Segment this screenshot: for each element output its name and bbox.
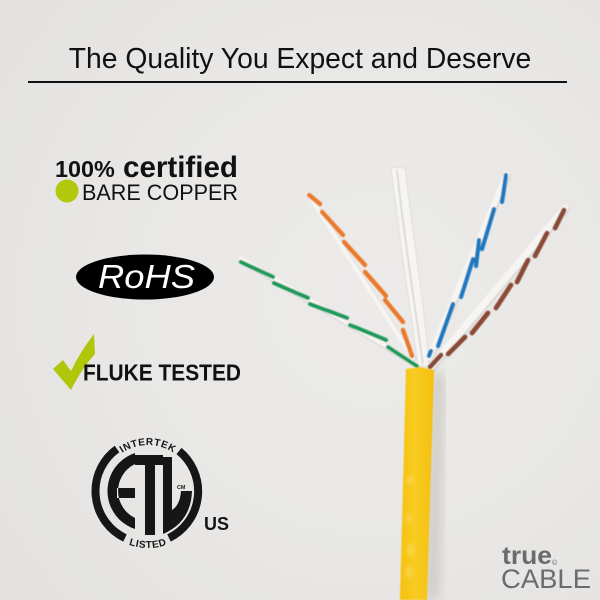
logo: trueCABLE: true [502, 542, 552, 570]
jacket shadow [426, 372, 444, 600]
cm mark: CM [177, 485, 186, 491]
us mark: US [204, 514, 229, 534]
intertek arc text: INTERTEK [119, 438, 176, 452]
icon: green check mark [53, 334, 95, 390]
white wire pair [391, 167, 429, 366]
title underline [28, 81, 567, 83]
letter T [135, 455, 163, 535]
certified label: certified [123, 151, 238, 184]
bare copper label: BARE COPPER [82, 180, 238, 205]
listed arc text: LISTED [129, 538, 166, 548]
logo: ETL listed [92, 438, 229, 548]
yellow jacket [400, 367, 434, 600]
green wire pair [241, 259, 418, 366]
badge: 100% certified bare copper: 100% [55, 156, 115, 182]
fluke tested label: FLUKE TESTED [83, 360, 241, 386]
badge: RoHS [76, 254, 214, 300]
badge: Fluke tested [53, 334, 241, 390]
registered mark: © [552, 559, 558, 567]
letter L [163, 457, 192, 534]
icon: green dot [56, 180, 78, 202]
jacket highlights [406, 475, 414, 578]
orange wire pair [308, 194, 414, 359]
logo: trueCABLE [501, 542, 591, 594]
logo: trueCABLE: CABLE [501, 564, 591, 594]
badge: 100% certified bare copper [55, 151, 238, 205]
blue wire pair [429, 174, 508, 359]
brown wire pair [430, 208, 566, 369]
letter E [107, 453, 135, 529]
badge: RoHS: RoHS [98, 258, 195, 295]
title: The Quality You Expect and Deserve [69, 42, 531, 74]
cable illustration [241, 167, 566, 600]
ring arcs [95, 449, 125, 538]
